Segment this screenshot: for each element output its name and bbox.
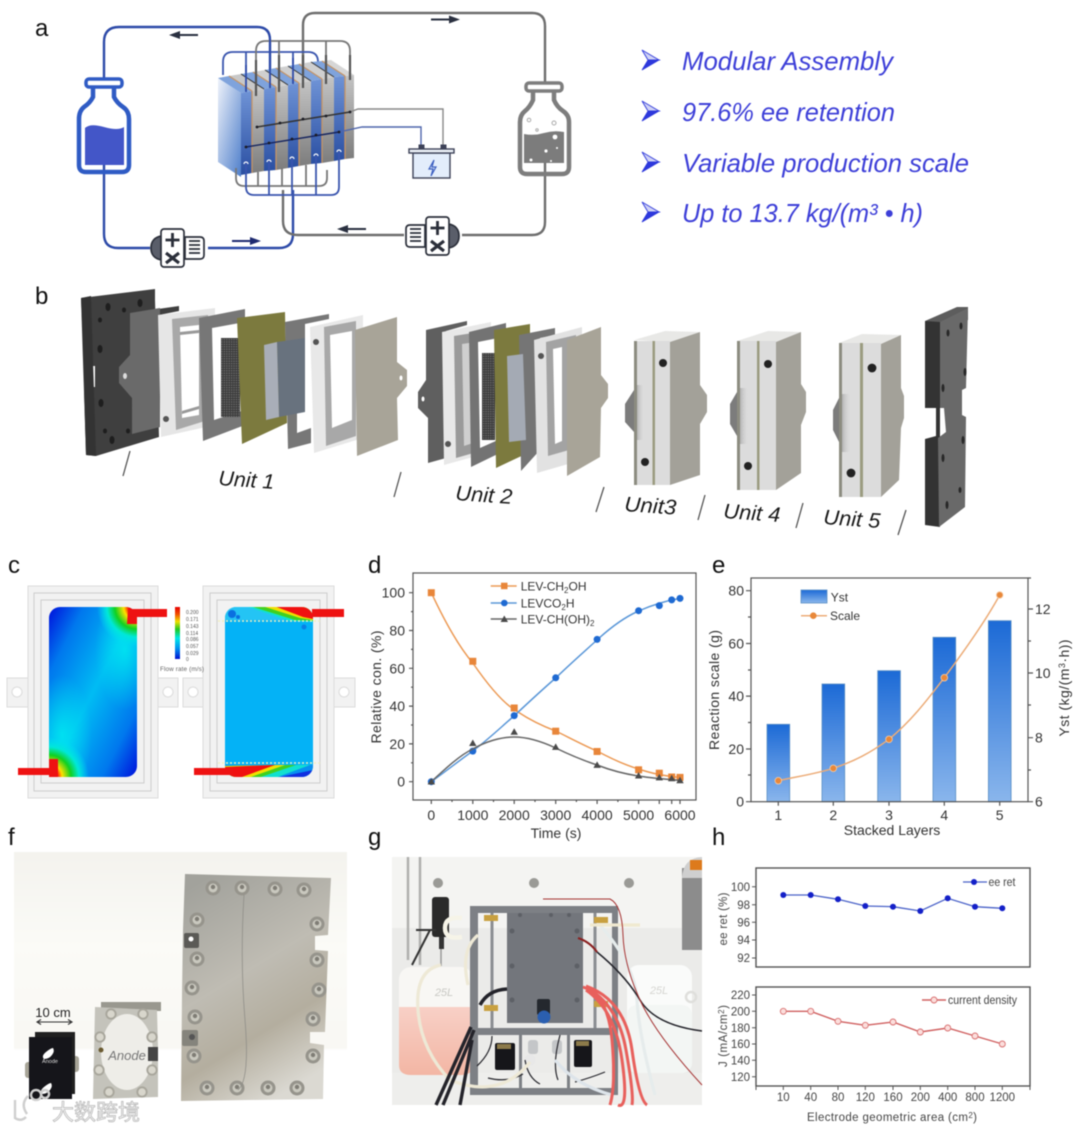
metal mesh [221, 338, 240, 417]
unit labels: Unit 2 [455, 482, 513, 509]
watermark: 大数跨境 [52, 1100, 140, 1125]
legend: OH [569, 580, 587, 594]
panel letter a: a [35, 15, 49, 42]
y tick labels: 60 [389, 660, 405, 676]
left flow field [48, 606, 138, 778]
small black stack [25, 1032, 79, 1099]
colour scale legend: 0.114 [186, 631, 198, 637]
bottom plot: current density: J (mA/cm [718, 1014, 730, 1067]
white catholyte tank: 25L [649, 985, 668, 997]
red wires [543, 899, 702, 1105]
panel letter b: b [35, 283, 48, 310]
medium aluminium stack [93, 1002, 161, 1099]
panel g: photo of bench rig [392, 857, 702, 1105]
unit 4 assembled [730, 331, 806, 490]
top plot: ee retention: 92 [737, 953, 750, 965]
bullet: space-time yield: Up to 13.7 kg/(m³ • h) [682, 198, 923, 228]
blue series LEVCO2H [428, 595, 684, 785]
right cell frame [183, 586, 355, 798]
electrode wires [246, 109, 443, 147]
slab tops [218, 76, 252, 93]
side face [218, 78, 241, 177]
x tick labels: 4000 [582, 807, 613, 823]
left cell frame [7, 586, 178, 798]
panel letter g: g [368, 824, 381, 851]
y tick labels: 80 [389, 622, 405, 638]
legend: LEV-CH(OH) [521, 612, 590, 626]
left inlet and outlet pipes [18, 609, 167, 777]
legend: 2 [564, 586, 569, 595]
colour scale legend: 0.143 [186, 624, 199, 630]
flow arrows [169, 16, 460, 245]
panel letter e: e [712, 552, 725, 579]
panel c: flow simulation [6, 585, 356, 799]
grey series LEV-CH(OH)2 [428, 728, 684, 784]
unit 2 layers [418, 321, 608, 476]
colour scale legend: 0.200 [186, 610, 199, 616]
medium aluminium stack: Anode [107, 1048, 146, 1063]
blue tubing loop [104, 27, 293, 248]
shared x axis title: ) [973, 1112, 977, 1124]
right inlet and outlet pipes [194, 609, 344, 775]
bullet: production scale: Variable production scale [682, 148, 969, 178]
shared x tick labels: 10 [777, 1092, 790, 1104]
legend: H [566, 596, 575, 610]
gold tube clamps [484, 915, 608, 1011]
grey gasket frame [199, 309, 245, 441]
right flow field [225, 606, 313, 778]
mounted stack plate [507, 913, 583, 1023]
bottom plot: current density: 220 [731, 990, 750, 1002]
panel h: stacked line charts [717, 868, 1030, 1124]
x tick labels: 4 [940, 807, 948, 823]
panel letter f: f [8, 824, 15, 851]
unit 3 assembled [625, 331, 707, 485]
left y tick labels: 60 [728, 636, 744, 652]
legend: Yst [831, 590, 849, 604]
colour scale legend: Flow rate (m/s) [160, 666, 204, 673]
right end plate [925, 307, 968, 527]
porous distributor lines [218, 621, 322, 763]
colour scale legend: 0.029 [186, 651, 199, 657]
clear tubing [418, 925, 655, 1095]
right y tick labels: 8 [1035, 730, 1043, 746]
legend [801, 590, 860, 623]
x tick labels: 6000 [664, 807, 696, 823]
bottom plot: current density: ) [718, 1005, 730, 1009]
plot frame and ticks [409, 573, 696, 804]
feature list [642, 46, 969, 228]
top plot: ee retention: 94 [737, 935, 751, 947]
left y tick labels: 20 [728, 741, 744, 757]
colour scale legend [160, 607, 204, 673]
axis titles: Yst (kg/(m [1056, 669, 1072, 736]
axis titles: Relative con. (%) [368, 630, 384, 744]
panel d: concentration chart [368, 573, 696, 841]
wall bolts [433, 878, 634, 888]
top plot: ee retention: ee ret (%) [718, 892, 730, 946]
right y tick labels: 10 [1035, 665, 1051, 681]
bottom plot: current density: 200 [731, 1006, 750, 1018]
bottom plot: current density [717, 987, 1030, 1090]
x tick labels [774, 807, 1004, 823]
small black stack: Anode [42, 1059, 58, 1065]
pumps [495, 1040, 592, 1070]
colour scale legend: 0.086 [186, 637, 199, 643]
legend: 2 [561, 603, 566, 612]
unit labels [218, 467, 881, 533]
second white frame [310, 315, 363, 453]
axis titles: 3 [1057, 663, 1067, 668]
grey tubing loop [283, 13, 545, 235]
legend [491, 580, 595, 628]
panel letter d: d [368, 552, 381, 579]
shared x tick labels [777, 1092, 1015, 1104]
felt electrode block [264, 338, 305, 420]
y tick labels: 100 [382, 584, 405, 600]
scale line [775, 592, 1003, 784]
x tick labels [427, 807, 696, 823]
stirrer head [412, 897, 462, 966]
shared x axis title: Electrode geometric area (cm [807, 1112, 968, 1124]
membrane [237, 312, 287, 444]
icon: grey flask with liquid [520, 83, 569, 174]
legend: 2 [590, 619, 595, 628]
x tick labels: 1 [774, 807, 782, 823]
colour scale legend: 0 [186, 657, 189, 663]
shared x tick labels: 1200 [990, 1092, 1015, 1104]
bottom plot: current density: 160 [731, 1039, 750, 1051]
x tick labels: 2 [829, 807, 837, 823]
colour scale legend: 0.057 [186, 644, 199, 650]
x tick labels: 3 [885, 807, 893, 823]
panel f: photo of three stack sizes [14, 852, 347, 1125]
y tick labels: 20 [389, 736, 405, 752]
stack of electrochemical cells [218, 40, 443, 195]
right shelf [682, 857, 702, 950]
legend: LEV-CH [521, 580, 564, 594]
left y tick labels: 0 [736, 794, 744, 810]
bullet: ee retention: 97.6% ee retention [682, 97, 895, 127]
legend: Scale [830, 609, 860, 623]
shared x tick labels: 80 [832, 1092, 844, 1104]
axis titles: Time (s) [531, 825, 581, 841]
x tick labels: 5 [996, 807, 1004, 823]
bottom manifold tubing [236, 150, 341, 195]
x tick labels: 3000 [540, 807, 571, 823]
shared x tick labels: 160 [883, 1092, 903, 1104]
bottom plot: current density: 120 [731, 1072, 750, 1084]
shared x tick labels: 400 [938, 1092, 957, 1104]
y tick labels [382, 584, 405, 790]
right y tick labels: 12 [1035, 601, 1051, 617]
pink anolyte tank [399, 967, 473, 1075]
x tick labels: 5000 [623, 807, 654, 823]
icon: blue circuit pump [151, 229, 204, 267]
left y tick labels [728, 582, 744, 810]
shared x tick labels: 200 [911, 1092, 930, 1104]
bottom plot: current density: 180 [731, 1023, 750, 1035]
black wires [436, 952, 702, 1105]
top plot: ee retention: 96 [737, 918, 750, 930]
unit labels: Unit 1 [218, 467, 275, 494]
axes and ticks [746, 578, 1033, 806]
icon: battery [409, 145, 454, 178]
separators between units [123, 451, 906, 535]
x tick labels: 0 [427, 807, 435, 823]
white flow frame [158, 308, 215, 437]
control wiring [477, 1035, 605, 1084]
unit labels: Unit3 [624, 493, 677, 520]
x tick labels: 1000 [457, 807, 489, 823]
unit labels: Unit 4 [723, 500, 781, 527]
top plot: ee retention [718, 868, 1030, 967]
panel a: flow schematic [79, 13, 569, 267]
icon: grey circuit pump [406, 217, 459, 255]
top plot: ee retention: 100 [731, 882, 750, 894]
legend: LEVCO [521, 596, 561, 610]
top plot: ee retention: ee ret [988, 877, 1016, 889]
wire junction dots [245, 111, 351, 148]
panel e: bars and scale line [706, 578, 1072, 838]
beige end plate [355, 317, 407, 456]
watermark [15, 1090, 140, 1125]
bottom plot: current density: 140 [731, 1056, 750, 1068]
bottom plot: current density: current density [948, 995, 1017, 1007]
y tick labels: 0 [397, 774, 405, 790]
large aluminium stack [181, 874, 331, 1101]
unit 5 assembled [833, 334, 904, 497]
right y tick labels: 6 [1035, 794, 1043, 810]
panel b: exploded stack [81, 289, 968, 535]
bottom plot: current density: 2 [717, 1009, 726, 1014]
back posts [492, 913, 595, 1028]
slab fronts [241, 91, 252, 175]
wall and cabinet background [392, 857, 702, 1105]
top plot: ee retention: 98 [737, 900, 750, 912]
photo background [14, 852, 347, 1120]
y tick labels: 40 [389, 698, 405, 714]
icon: blue bottle with liquid [79, 79, 129, 172]
unit 1 end plate [81, 289, 159, 456]
bullet: modular assembly: Modular Assembly [682, 46, 895, 76]
pink anolyte tank: 25L [434, 987, 453, 999]
shared x tick labels: 800 [965, 1092, 985, 1104]
axis titles: ·h)) [1056, 640, 1072, 663]
right y tick labels [1035, 601, 1051, 810]
left y tick labels: 80 [728, 582, 744, 598]
colour scale legend: 0.171 [186, 617, 199, 623]
orange series LEV-CH2OH [428, 589, 684, 781]
aluminium frame [470, 906, 618, 1095]
pump valves [524, 1040, 562, 1066]
shared x tick labels: 120 [856, 1092, 875, 1104]
panel letter h: h [712, 824, 725, 851]
shared x axis title: 2 [968, 1111, 973, 1120]
gasket plate with tab [119, 306, 179, 434]
axis titles [706, 630, 1072, 838]
axis titles: Reaction scale (g) [706, 630, 722, 750]
scale bar 10 cm: 10 cm [35, 1005, 71, 1020]
bars for Yst [767, 621, 1011, 802]
x tick labels: 2000 [499, 807, 530, 823]
cathode gasket frame [285, 314, 329, 449]
left y tick labels: 40 [728, 688, 744, 704]
top manifold tubing behind stack [223, 41, 350, 75]
panel letter c: c [8, 552, 20, 579]
shared x tick labels: 40 [804, 1092, 817, 1104]
axis titles: Stacked Layers [844, 822, 940, 838]
unit labels: Unit 5 [823, 506, 881, 533]
axis titles [368, 630, 581, 841]
white catholyte tank [627, 965, 696, 1073]
multimeter and blue knob [537, 999, 550, 1024]
